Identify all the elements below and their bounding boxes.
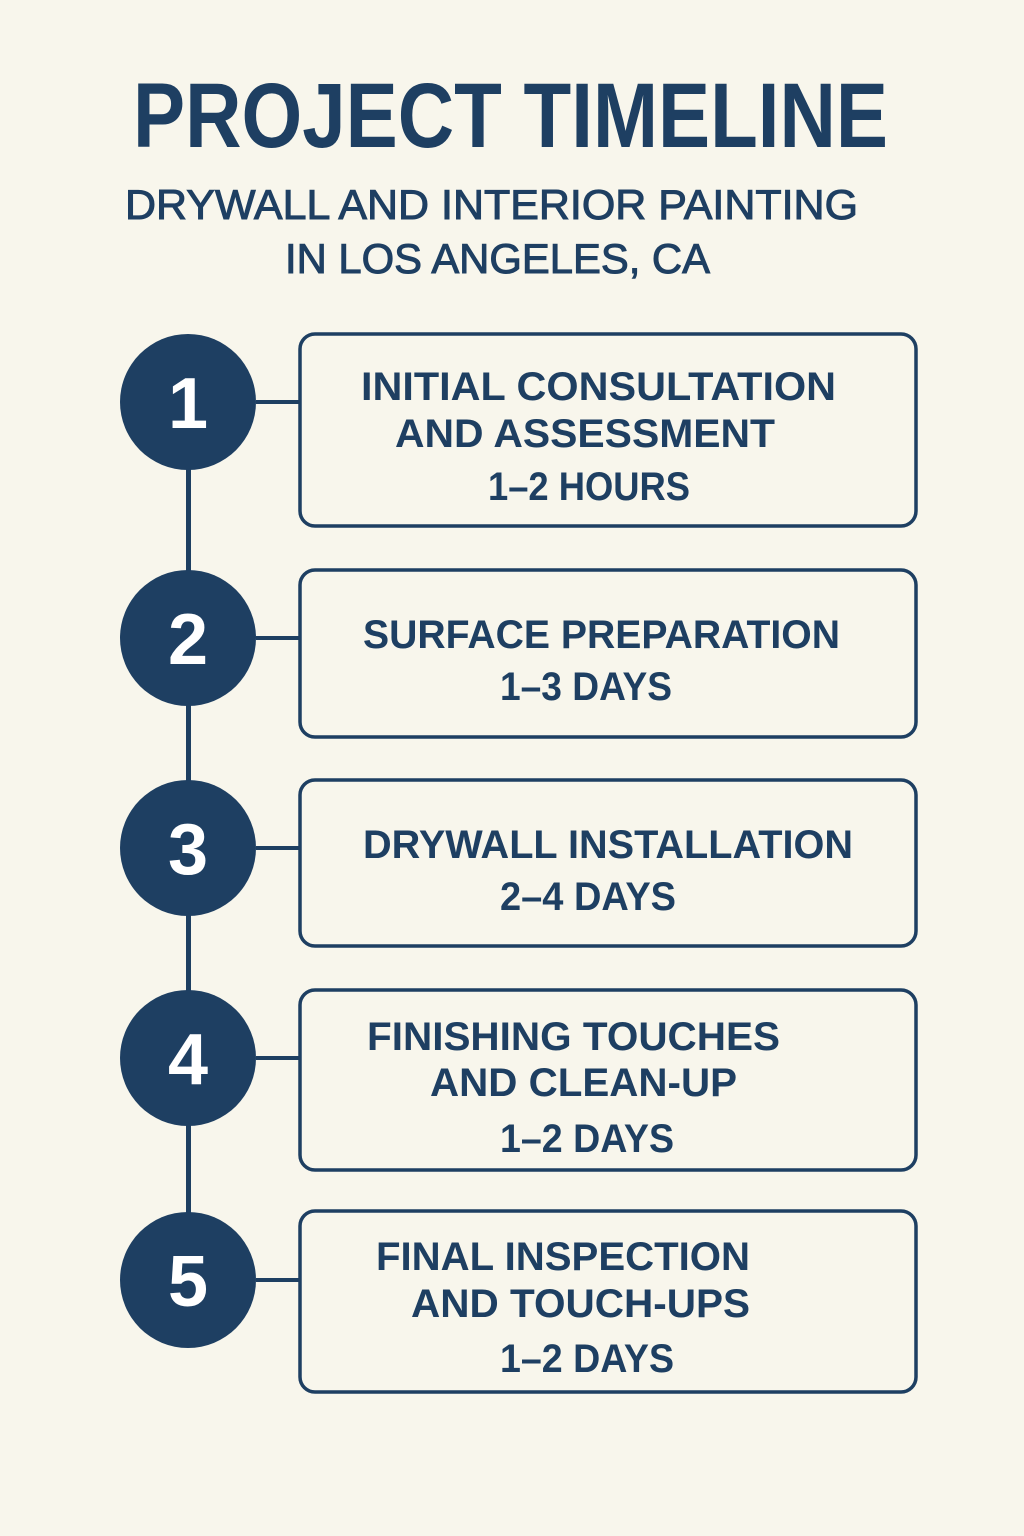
timeline vertical line (186, 402, 191, 1280)
step 1: 1 (168, 364, 208, 444)
step 2: 1–3 DAYS (500, 665, 672, 709)
step 5: AND TOUCH-UPS (411, 1282, 750, 1326)
step 3: 3 (168, 810, 208, 890)
step 4: 1–2 DAYS (500, 1117, 674, 1161)
step 2 (120, 570, 916, 737)
subtitle: DRYWALL AND INTERIOR PAINTING (125, 181, 858, 228)
step 5: 5 (168, 1242, 208, 1322)
step 1: 1–2 HOURS (488, 465, 690, 509)
step 2: 2 (168, 600, 208, 680)
step 1: AND ASSESSMENT (395, 412, 775, 456)
subtitle (125, 181, 858, 282)
step 1: INITIAL CONSULTATION (361, 365, 836, 409)
step 5: FINAL INSPECTION (376, 1235, 750, 1279)
step 3: 2–4 DAYS (500, 875, 676, 919)
step 3: DRYWALL INSTALLATION (363, 823, 853, 867)
step 4: 4 (168, 1020, 208, 1100)
step 4 (120, 990, 916, 1170)
step 4: AND CLEAN-UP (430, 1061, 737, 1105)
step 1 (120, 334, 916, 526)
step 4: FINISHING TOUCHES (367, 1015, 780, 1059)
subtitle: IN LOS ANGELES, CA (285, 235, 710, 282)
step 5: 1–2 DAYS (500, 1337, 674, 1381)
title: PROJECT TIMELINE (133, 65, 888, 167)
step 2: SURFACE PREPARATION (363, 613, 840, 657)
step 5 (120, 1211, 916, 1392)
step 3 (120, 780, 916, 946)
